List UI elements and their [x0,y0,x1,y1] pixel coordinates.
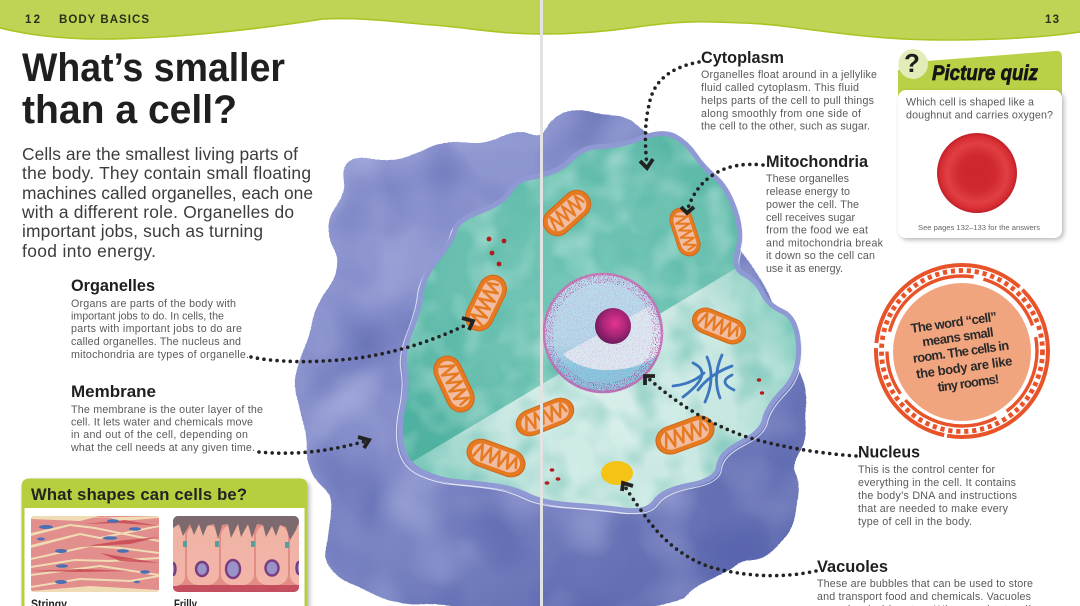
text block: nucleus: the body’s DNA and instructions [858,490,1017,502]
text block: nucleus: that are needed to make every [858,503,1009,515]
quiz title: Picture quiz [932,62,1038,85]
arrow: membrane [259,437,369,453]
header band left [0,0,540,39]
text block: mitochondria: and mitochondria break [766,238,884,250]
text block: organelles [71,276,249,361]
text block: organelles: Organelles [71,276,155,295]
panel: what shapes can cells be [22,479,315,606]
title: than a cell? [22,88,237,132]
intro text: Cells are the smallest living parts of [22,144,298,164]
text block: vacuoles: These are bubbles that can be used to store [817,578,1033,590]
text block: mitochondria: cell receives sugar [766,212,855,224]
text block: membrane: The membrane is the outer layer of the [71,404,263,416]
text block: cytoplasm: helps parts of the cell to pull things [701,95,874,107]
text block: membrane: in and out of the cell, depending on [71,429,248,441]
text block: vacuoles: Vacuoles [817,557,888,576]
callout: stamp [876,265,1048,437]
stamp text: tiny rooms! [937,371,1000,395]
red blood cell [937,133,1017,213]
text block: cytoplasm: along smoothly from one side of [701,108,861,120]
text block: cytoplasm: fluid called cytoplasm. This fluid [701,82,859,94]
header band right [542,0,1080,40]
text block: organelles: called organelles. The nucleus and [71,336,241,348]
cell outer body (purple) [297,112,807,606]
image: stringy muscle cells [31,516,159,592]
vacuole [601,461,633,485]
arrow: vacuoles [622,483,816,576]
text block: membrane: Membrane [71,382,156,401]
text block: nucleus: This is the control center for [858,464,995,476]
text block: organelles: parts with important jobs to do are [71,323,242,335]
section name: BODY BASICS [59,14,149,26]
text block: cytoplasm: Cytoplasm [701,48,784,67]
quiz question [906,96,1053,122]
text block: nucleus [858,442,1017,528]
small red dots [487,237,764,485]
text block: nucleus: type of cell in the body. [858,516,972,528]
intro text: food into energy. [22,241,156,261]
quiz banner [898,51,1062,100]
cytoplasm [402,136,796,508]
stamp text [908,308,1015,398]
intro text: with a different role. Organelles do [21,202,294,222]
page number left: 12 [25,14,40,26]
title: What’s smaller [22,46,285,90]
text block: nucleus: Nucleus [858,442,920,462]
text block: mitochondria: it down so the cell can [766,250,875,262]
text block: mitochondria: from the food we eat [766,224,868,236]
nucleolus [595,308,631,344]
book gutter [540,0,543,606]
text block: organelles: important jobs to do. In cells, the [71,310,224,322]
title [22,46,285,132]
text block: cytoplasm: Organelles float around in a jellylike [701,69,877,81]
panel: picture quiz [898,48,1062,238]
answer note: See pages 132–133 for the answers [918,223,1040,232]
intro text: machines called organelles, each one [22,183,313,203]
text block: mitochondria: Mitochondria [766,152,869,171]
text block: nucleus: everything in the cell. It contains [858,477,1016,489]
stamp text: The word “cell” [910,309,998,336]
question mark: ? [904,48,920,78]
text block: cytoplasm [701,48,877,132]
illustration: cell [297,112,810,606]
text block: organelles: Organs are parts of the body with [71,298,236,310]
intro text: important jobs, such as turning [22,221,263,241]
text block: mitochondria: power the cell. The [766,199,859,211]
text block: mitochondria: release energy to [766,186,850,198]
quiz card [898,90,1062,238]
text block: membrane [70,382,263,454]
image: frilly cells [173,516,299,592]
text block: mitochondria: These organelles [766,173,849,185]
stamp text: room. The cells in [912,337,1010,366]
text block: membrane: what the cell needs at any given time. [70,442,255,454]
stamp text: the body are like [915,353,1013,382]
mitochondria organelles [429,185,749,481]
arrow: cytoplasm [640,62,699,168]
page number right: 13 [1045,14,1059,26]
text block: vacuoles [817,557,1033,606]
chromosome strands [673,355,734,402]
text block: cytoplasm: the cell to the other, such as sugar. [701,120,870,132]
text block: mitochondria: use it as energy. [766,263,843,275]
text block: vacuoles: and transport food and chemicals. Vacuoles [817,591,1031,603]
text block: membrane: cell. It lets water and chemicals move [71,416,253,428]
stamp text: means small [921,324,995,349]
nucleus [543,273,663,393]
text block: organelles: mitochondria are types of organelle. [71,349,249,361]
quiz question: doughnut and carries oxygen? [906,110,1053,122]
panel heading: What shapes can cells be? [31,485,247,504]
arrow: organelles [251,318,473,362]
text block: mitochondria [766,152,884,275]
quiz question: Which cell is shaped like a [906,96,1034,108]
arrow: mitochondria [681,164,763,213]
membrane highlight lines [396,137,802,514]
speech bubble icon [898,49,928,80]
intro text: the body. They contain small floating [22,163,311,183]
arrow: nucleus [645,376,856,456]
membrane ring [400,134,799,511]
intro text [21,144,313,261]
